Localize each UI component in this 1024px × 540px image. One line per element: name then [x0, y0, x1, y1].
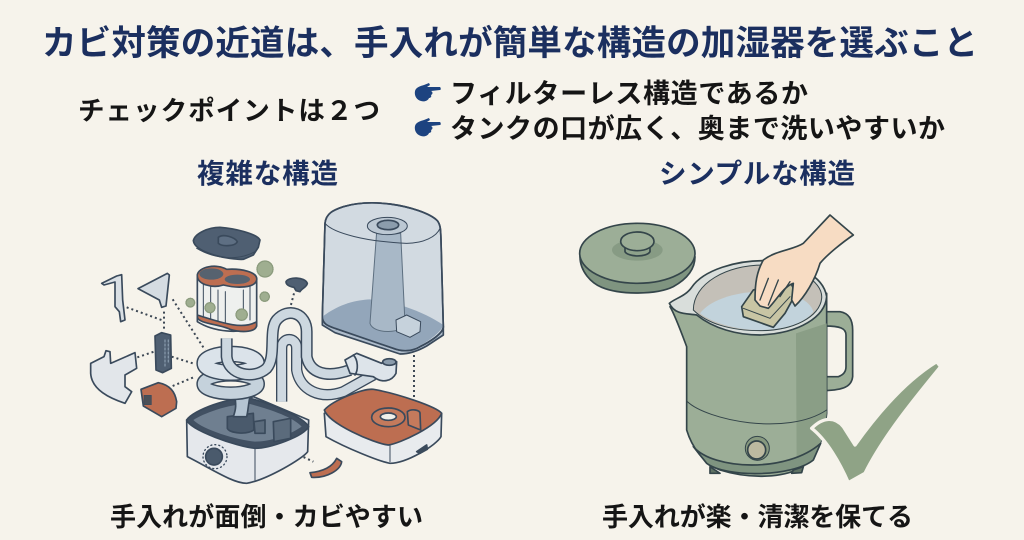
funnel: [138, 273, 169, 307]
small handle part: [310, 458, 342, 477]
handle: [825, 312, 853, 391]
L bracket: [102, 275, 125, 322]
dotted connectors: [127, 293, 414, 462]
kettle body: [670, 293, 827, 476]
circuit block: [155, 333, 171, 373]
illustration: exploded complex humidifier: [91, 203, 443, 483]
base unit: [187, 397, 309, 483]
lower tray: [324, 389, 442, 463]
caption: complex: 手入れが面倒・カビやすい: [110, 502, 423, 532]
icon: pointing hand 2: [415, 118, 441, 136]
checklist item 2: タンクの口が広く、奥まで洗いやすいか: [450, 113, 945, 144]
heading: complex: 複雑な構造: [197, 158, 338, 189]
check point label: チェックポイントは２つ: [78, 96, 380, 126]
lid: [580, 223, 695, 293]
orange part: [141, 383, 177, 417]
heading: simple: シンプルな構造: [659, 158, 855, 189]
check mark: [812, 362, 941, 483]
mold spores: [186, 261, 273, 320]
hand: [755, 215, 853, 308]
small float knob: [286, 278, 307, 292]
top cap: [193, 227, 260, 259]
curved panel: [91, 351, 137, 403]
tank: [322, 203, 443, 354]
checklist item 1: フィルターレス構造であるか: [450, 79, 808, 109]
caption: simple: 手入れが楽・清潔を保てる: [602, 502, 913, 532]
checklist: [415, 79, 945, 144]
filter: [197, 266, 257, 331]
title: カビ対策の近道は、手入れが簡単な構造の加湿器を選ぶこと: [42, 24, 978, 63]
sponge: [742, 282, 796, 327]
icon: pointing hand 1: [415, 83, 441, 101]
spiral coil and pipes: [203, 313, 373, 417]
kettle rim and interior: [669, 261, 827, 335]
elbow connector: [345, 353, 397, 381]
illustration: simple kettle humidifier: [580, 215, 941, 483]
